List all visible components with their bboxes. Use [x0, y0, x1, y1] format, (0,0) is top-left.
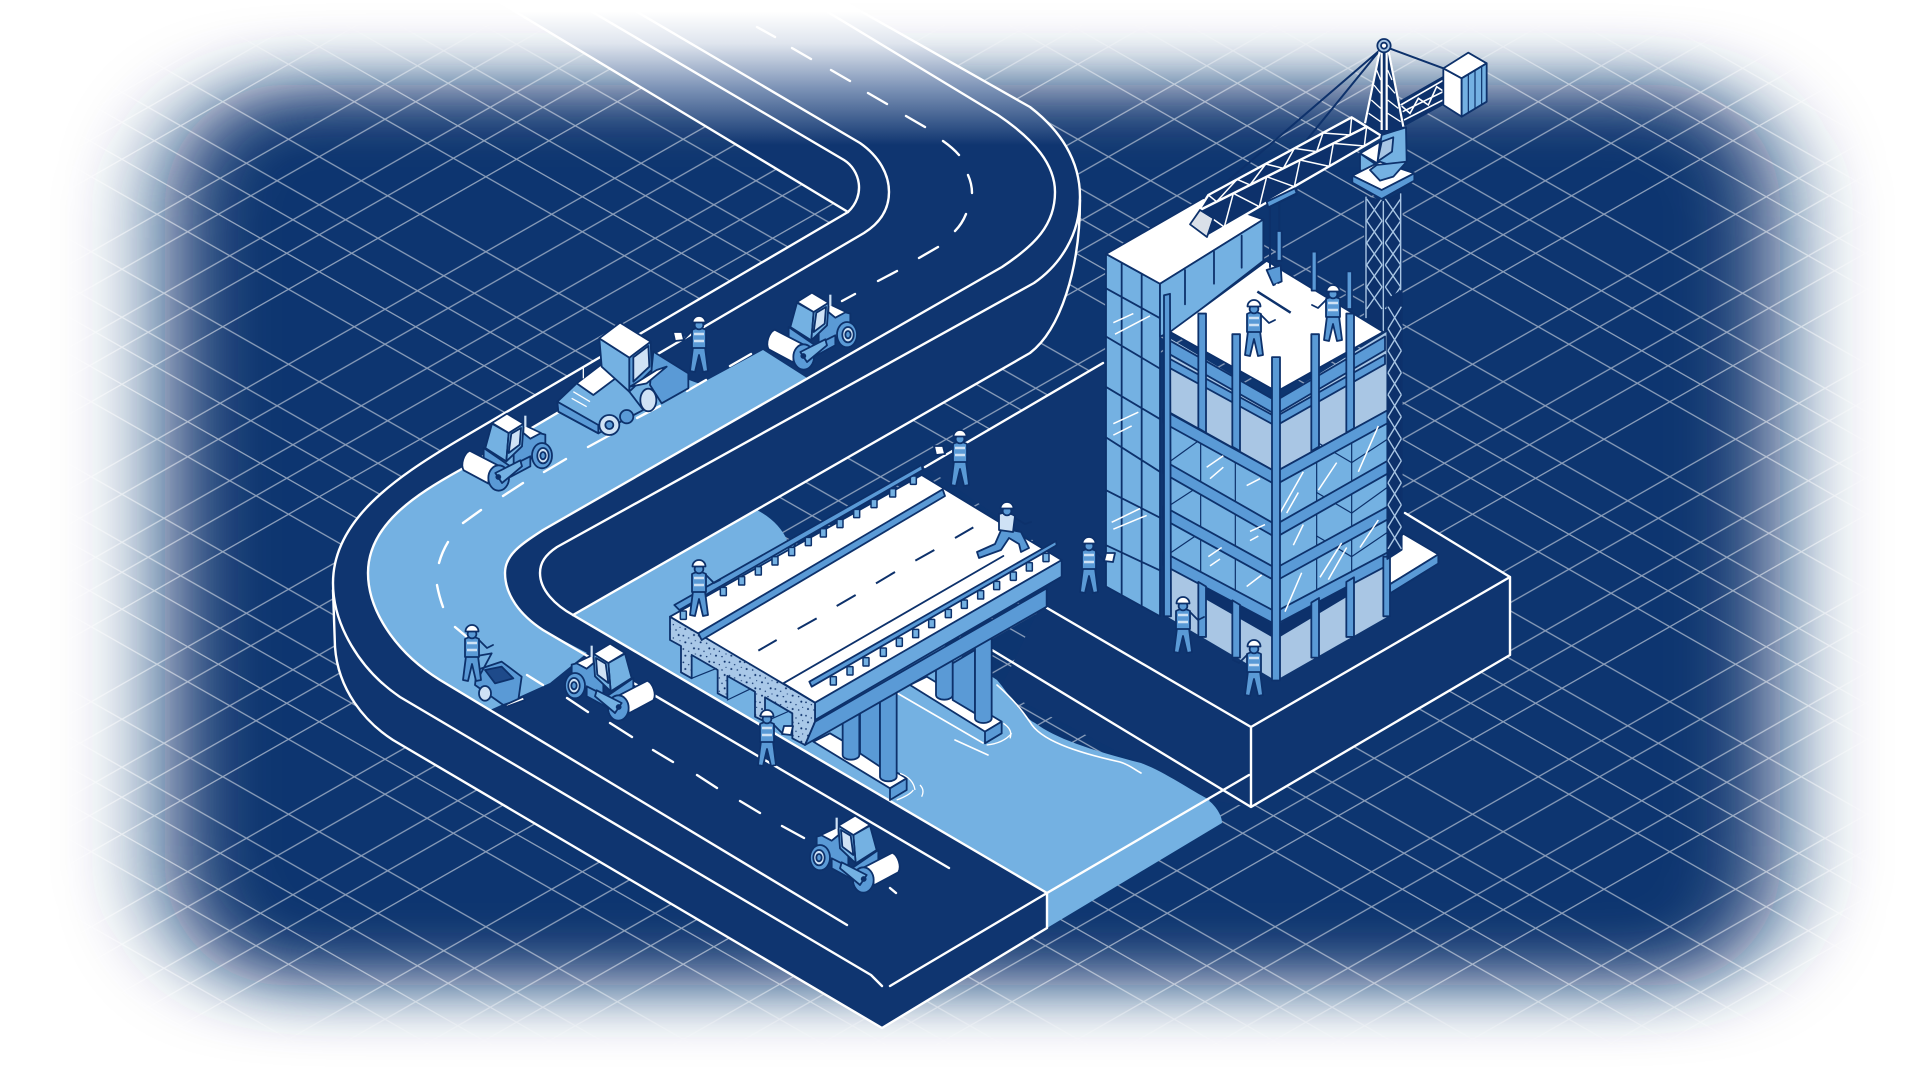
worker: with compactor	[463, 625, 493, 681]
walk-behind compactor	[473, 653, 525, 707]
crane jib lattice	[1190, 117, 1382, 237]
trolley	[1267, 188, 1297, 207]
crane cab	[1360, 127, 1407, 180]
road roller: front lane	[810, 816, 900, 893]
white roof of completed block	[1106, 198, 1263, 284]
crane base pad	[1362, 534, 1438, 593]
road roller: left	[462, 414, 552, 491]
lower beam	[805, 588, 1047, 745]
water ripples at piers	[897, 723, 1012, 800]
crane tower front column	[1387, 291, 1402, 559]
footing: front	[813, 733, 907, 800]
worker: building front left	[1174, 597, 1204, 653]
crane cables	[1213, 48, 1443, 193]
counterweight	[1443, 53, 1487, 117]
glass glare	[1207, 426, 1378, 612]
road edge lines	[333, 0, 1249, 1028]
right railing	[809, 541, 1057, 687]
bridge piers	[843, 633, 992, 781]
bridge	[670, 465, 1062, 800]
worker: surveyor behind paver	[673, 316, 708, 372]
paver machine	[557, 323, 688, 435]
open upper floor, left	[1165, 337, 1276, 472]
structural columns	[1164, 252, 1390, 681]
glass mullions	[1201, 431, 1352, 596]
glass levels, right	[1276, 410, 1388, 614]
worker: building front	[1233, 640, 1263, 696]
slab edge beams	[1167, 337, 1385, 426]
footing: rear	[910, 677, 1002, 743]
worker: on bridge left	[690, 560, 720, 616]
river under the bridge	[573, 510, 1222, 928]
paved light-blue road section	[368, 350, 807, 710]
counter jib	[1400, 75, 1460, 125]
ground floor, left	[1167, 561, 1276, 681]
left curb	[698, 489, 945, 640]
building platform	[925, 363, 1510, 807]
rear wall	[1160, 220, 1263, 337]
background: blueprint field	[165, 85, 1780, 985]
top floor slab	[1170, 261, 1383, 392]
road slab	[333, 0, 1080, 1028]
worker: top floor right	[1312, 285, 1342, 341]
crane tower upper part and base pad	[1362, 192, 1438, 593]
road centre dashes	[437, 27, 972, 893]
crane upper works	[1190, 39, 1487, 237]
worker: bridge far end	[934, 430, 969, 486]
hook assembly	[1257, 189, 1297, 313]
worker: at bridge pier	[758, 710, 793, 766]
open upper floor, right	[1276, 332, 1388, 472]
lane dashes	[758, 527, 973, 651]
right sidewalk edge	[783, 556, 1003, 703]
worker: top floor with hook	[1245, 300, 1275, 356]
floor ceilings	[1168, 440, 1387, 557]
underside openings	[681, 647, 792, 740]
ground floor lintels	[1205, 584, 1347, 637]
road roller: lower curve	[565, 644, 655, 721]
crane turntable	[1352, 162, 1414, 199]
glass levels, left	[1165, 410, 1276, 614]
deck fascia	[815, 560, 1062, 720]
worker: kneeling on deck	[977, 502, 1031, 558]
worker: reading plans by building	[1080, 537, 1115, 593]
left railing	[674, 465, 923, 619]
building under construction	[1106, 189, 1402, 681]
crane mast	[1365, 39, 1403, 137]
road roller: far right	[767, 293, 857, 370]
speckled concrete face	[670, 617, 815, 745]
glass left wall	[1106, 254, 1160, 616]
deck top	[670, 475, 1062, 703]
floor beams	[1163, 410, 1388, 625]
ground floor, right	[1276, 557, 1388, 681]
